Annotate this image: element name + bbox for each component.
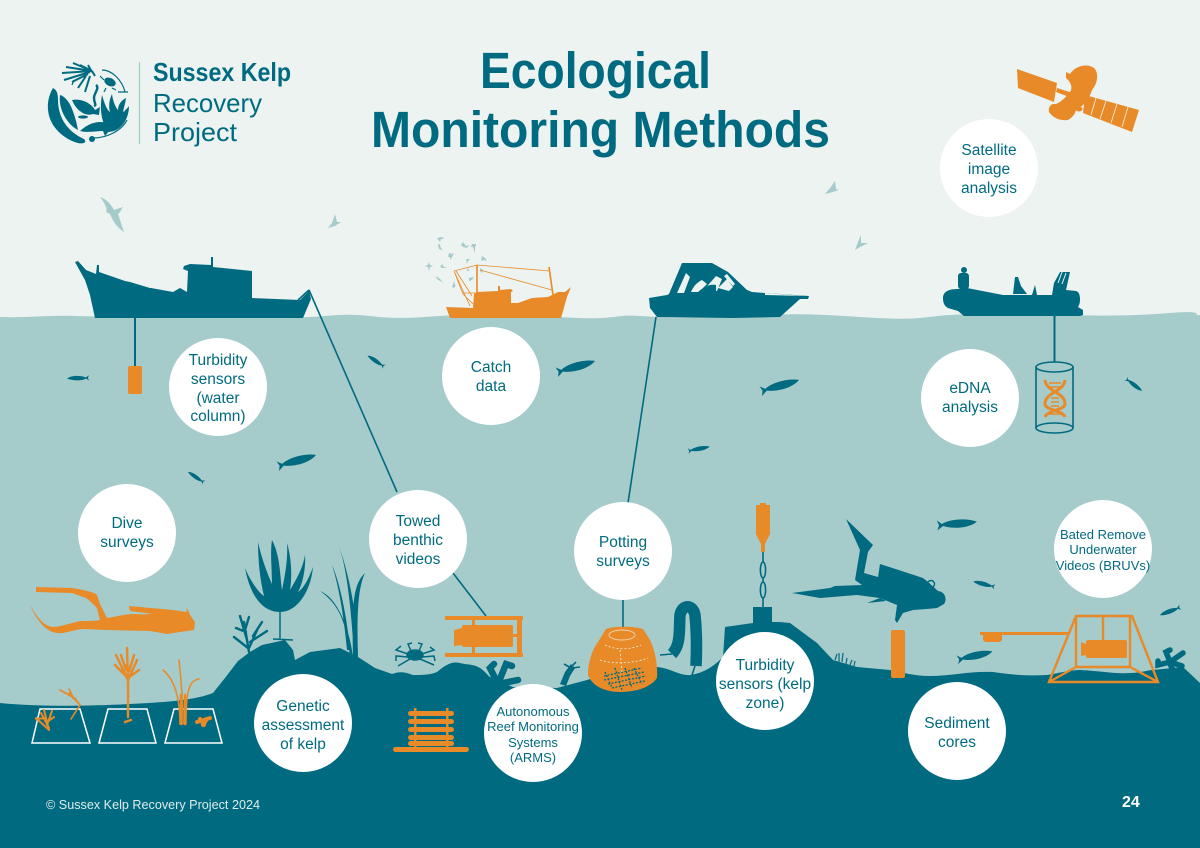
label: turbidity sensors kelp zone: zone) [746,695,784,712]
logo emblem [48,63,129,143]
label: BRUVs: Bated Remove [1060,527,1146,542]
label: potting surveys: surveys [596,553,650,570]
inflatable survey boat [943,267,1083,362]
label: satellite image analysis: analysis [961,180,1017,197]
label: ARMS: Reef Monitoring [487,719,579,734]
label: catch data [442,327,540,425]
label: ARMS: Systems [508,735,558,750]
title: Monitoring Methods [371,101,830,158]
seabed [0,607,1200,848]
label: sediment cores: Sediment [924,715,990,732]
label: genetic assessment of kelp: of kelp [280,736,326,753]
label: turbidity sensors kelp zone [716,632,814,730]
label: ARMS [484,684,582,782]
icon: bird flock [425,237,487,288]
label: turbidity sensors water column [169,338,267,436]
label: turbidity sensors water column: (water [196,390,240,407]
icon: seabed tuft [835,653,855,666]
icon: eDNA cylinder [1036,362,1073,433]
logo [48,57,291,147]
icon: DNA helix [1045,380,1065,417]
logo wordmark: Project [153,117,238,147]
label: catch data: Catch [471,359,511,376]
icon: lobster [560,662,580,686]
fish [67,353,1181,664]
label: turbidity sensors kelp zone: sensors (kelp [719,676,811,693]
icon: gull small [825,181,839,194]
label: dive surveys: surveys [100,534,154,551]
icon: moored turbidity sensor [756,503,770,607]
title: Ecological [480,42,711,99]
icon: grass blades [320,543,365,658]
first fishing boat [75,257,311,318]
icon: sediment core [891,630,905,678]
label: eDNA analysis: analysis [942,399,998,416]
label: satellite image analysis: image [968,161,1010,178]
label: towed benthic videos [369,490,467,588]
logo wordmark [153,57,291,147]
label: sediment cores [908,682,1006,780]
cabin cruiser boat [649,263,809,318]
label: genetic assessment of kelp [254,674,352,772]
label: ARMS: (ARMS) [510,750,556,765]
label: turbidity sensors water column: sensors [191,371,245,388]
potting line [623,317,656,628]
orange seaweed specimens [36,648,210,730]
icon: crab [396,643,435,666]
label: genetic assessment of kelp: assessment [262,717,345,734]
camera [1081,640,1127,658]
label: dive surveys [78,484,176,582]
label: genetic assessment of kelp: Genetic [276,698,330,715]
page number: 24 [1122,794,1140,811]
icon: satellite [1017,66,1139,132]
label: catch data: data [476,378,506,395]
icon: large kelp [245,540,313,640]
label: towed benthic videos: Towed [396,513,440,530]
title [371,42,830,158]
orange fishing trawler [446,265,571,318]
logo wordmark: Recovery [153,88,262,118]
kelp plants on reef [234,540,365,658]
label: BRUVs: Videos (BRUVs) [1056,558,1150,573]
label: sediment cores: cores [938,734,976,751]
label: towed benthic videos: videos [396,551,441,568]
label: eDNA analysis [921,349,1019,447]
label: turbidity sensors water column: column) [190,408,246,425]
label: BRUVs: Underwater [1069,542,1137,557]
icon: ARMS stack [393,708,469,752]
icon: gull large [100,197,124,232]
bait arm [980,632,1068,642]
tow line [298,290,486,616]
teal diver [792,519,946,623]
label: turbidity sensors water column: Turbidity [189,352,248,369]
icon: starfish [490,664,518,692]
orange diver [30,587,195,634]
label: ARMS: Autonomous [496,704,570,719]
icon: turbidity sensor water column [128,318,142,394]
label: turbidity sensors kelp zone: Turbidity [736,657,795,674]
label: potting surveys [574,502,672,600]
icon: sugar kelp blades [660,607,696,675]
label: satellite image analysis: Satellite [961,142,1017,159]
logo wordmark: Sussex Kelp [153,57,291,87]
icon: kelp quadrats [32,648,222,743]
label: eDNA analysis: eDNA [949,380,991,397]
water [0,312,1200,848]
label: satellite image analysis [940,119,1038,217]
icon: branching seaweed [234,616,267,652]
copyright footer: © Sussex Kelp Recovery Project 2024 [46,797,260,812]
icon: towed video rig [445,616,523,657]
icon: gull small [855,235,868,250]
label: BRUVs [1054,500,1152,598]
icon: BRUV frame [980,616,1158,682]
icon: starfish right [1158,650,1183,672]
label: towed benthic videos: benthic [393,532,443,549]
icon: crab pot [588,627,657,692]
label: dive surveys: Dive [111,515,143,532]
label: potting surveys: Potting [599,534,647,551]
icon: gull small [328,214,341,228]
